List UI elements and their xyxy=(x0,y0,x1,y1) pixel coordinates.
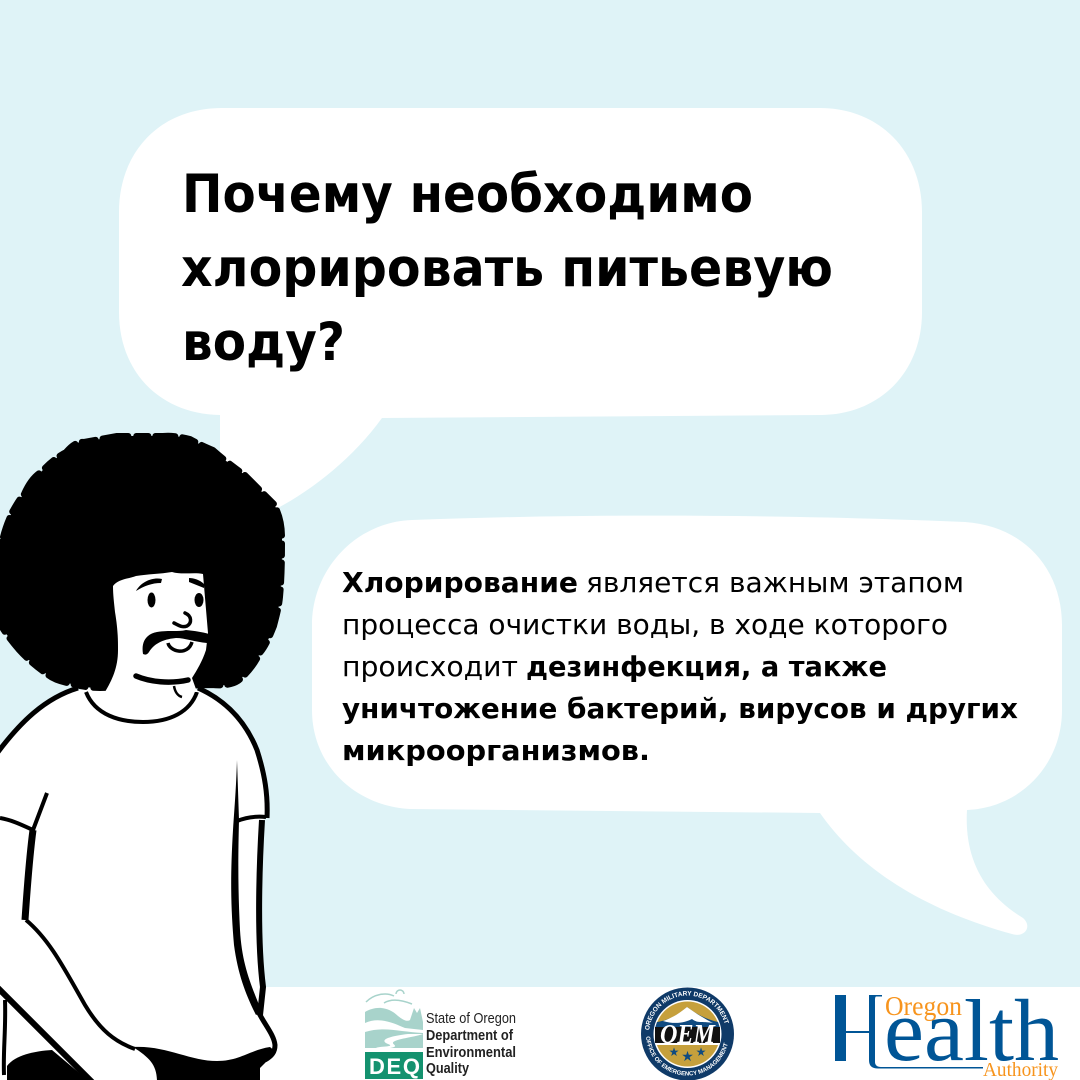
title: воду? xyxy=(182,312,345,373)
face xyxy=(105,572,209,697)
DEQ wording: Department of xyxy=(426,1028,513,1044)
eyes xyxy=(148,592,204,608)
answer text xyxy=(342,567,1018,767)
DEQ landscape xyxy=(365,990,423,1048)
mouth xyxy=(168,642,192,651)
word: Oregon: Oregon xyxy=(885,991,962,1021)
DEQ wording: Environmental xyxy=(426,1045,516,1061)
afro hair xyxy=(0,436,282,688)
moustache xyxy=(143,630,209,655)
answer text: является важным этапом xyxy=(586,567,964,599)
DEQ green badge xyxy=(365,1052,423,1079)
trousers xyxy=(7,1047,276,1080)
answer text: Хлорирование xyxy=(342,567,578,599)
eyebrows xyxy=(136,578,204,591)
logo: OEM seal: OEM xyxy=(660,1019,716,1049)
speech bubble: answer xyxy=(312,516,1062,935)
logo: OEM seal: OFFICE OF EMERGENCY MANAGEMENT xyxy=(646,1036,728,1076)
answer text: дезинфекция, а также xyxy=(526,651,887,683)
chin line xyxy=(136,676,188,682)
logo: Oregon Health Authority xyxy=(835,983,1059,1080)
word: ealth: ealth xyxy=(884,983,1059,1080)
logo: Oregon DEQ xyxy=(365,990,516,1079)
speech bubble: question xyxy=(119,108,922,517)
answer text: уничтожение бактерий, вирусов и других xyxy=(342,693,1018,725)
t-shirt and arms xyxy=(0,688,277,1080)
logo: OEM seal: ★ xyxy=(681,1050,694,1065)
DEQ letters: DEQ xyxy=(369,1054,420,1079)
logo: OEM seal: ★ xyxy=(669,1045,679,1059)
title: хлорировать питьевую xyxy=(181,238,833,299)
DEQ wording: Quality xyxy=(426,1061,469,1077)
neck detail xyxy=(174,686,182,697)
title: Почему необходимо xyxy=(182,164,753,225)
character: man with afro xyxy=(0,436,282,1080)
letter H xyxy=(835,995,983,1068)
DEQ wording xyxy=(426,1011,516,1077)
logo: OEM seal xyxy=(641,988,734,1080)
hand and leg lines xyxy=(0,988,92,1080)
logo: OEM seal: OREGON MILITARY DEPARTMENT xyxy=(645,990,729,1030)
logo: OEM seal: ★ xyxy=(696,1045,706,1059)
answer text: процесса очистки воды, в ходе которого xyxy=(342,609,948,641)
answer text: микроорганизмов. xyxy=(342,735,650,767)
nose xyxy=(174,613,191,627)
DEQ wording: State of Oregon xyxy=(426,1011,516,1027)
title xyxy=(181,164,833,373)
answer text: происходит xyxy=(342,651,518,683)
